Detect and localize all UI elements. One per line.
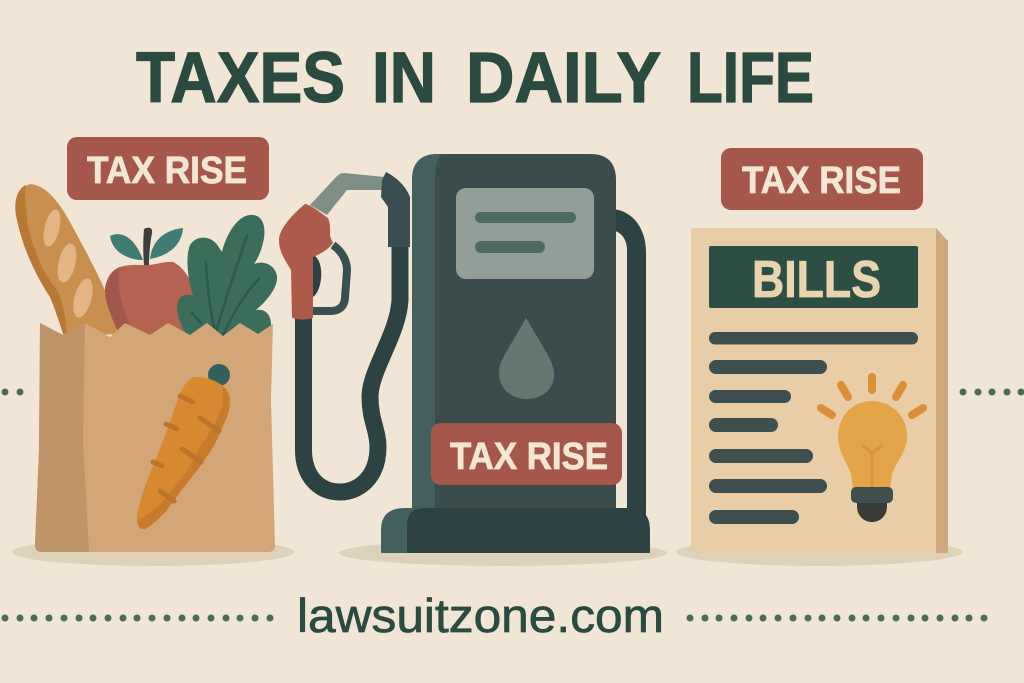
rear hose	[612, 209, 646, 515]
dotted line: middle right	[960, 388, 1024, 396]
icon: apple	[105, 228, 195, 340]
nozzle	[279, 172, 410, 320]
pump base	[381, 508, 650, 553]
badge: tax rise pump	[431, 423, 622, 485]
icon: carrot	[137, 364, 230, 529]
badge: tax rise bills: TAX RISE	[742, 160, 901, 202]
bills header: BILLS	[752, 251, 881, 309]
dotted line: bottom right	[686, 614, 988, 622]
badge: tax rise groceries: TAX RISE	[87, 150, 247, 192]
bills header	[709, 246, 918, 309]
panel: bills	[676, 148, 962, 566]
badge: tax rise bills	[721, 148, 923, 210]
pump body	[412, 154, 616, 510]
pump screen	[456, 188, 594, 279]
badge: tax rise groceries	[67, 137, 269, 200]
icon: baguette	[15, 184, 122, 336]
icon: fuel drop	[499, 318, 554, 399]
icon: light bulb	[821, 377, 923, 522]
icon: leafy greens	[177, 215, 277, 337]
bill text lines	[709, 332, 918, 524]
ground shadow: groceries	[12, 538, 294, 566]
badge: tax rise pump: TAX RISE	[450, 436, 608, 478]
ground shadow: bills	[676, 538, 962, 566]
dotted line: bottom left	[2, 614, 274, 622]
title: IN	[372, 39, 436, 118]
title: LIFE	[687, 39, 814, 118]
title: DAILY	[466, 39, 661, 118]
footer url: lawsuitzone.com	[297, 589, 664, 642]
bill paper	[691, 228, 948, 553]
title: TAXES	[136, 39, 345, 118]
fuel hose	[304, 245, 400, 492]
ground shadow: pump	[339, 540, 667, 566]
dotted line: middle left	[2, 388, 24, 396]
panel: groceries	[12, 137, 294, 566]
icon: paper bag	[35, 323, 275, 552]
panel: fuel pump	[279, 154, 667, 566]
